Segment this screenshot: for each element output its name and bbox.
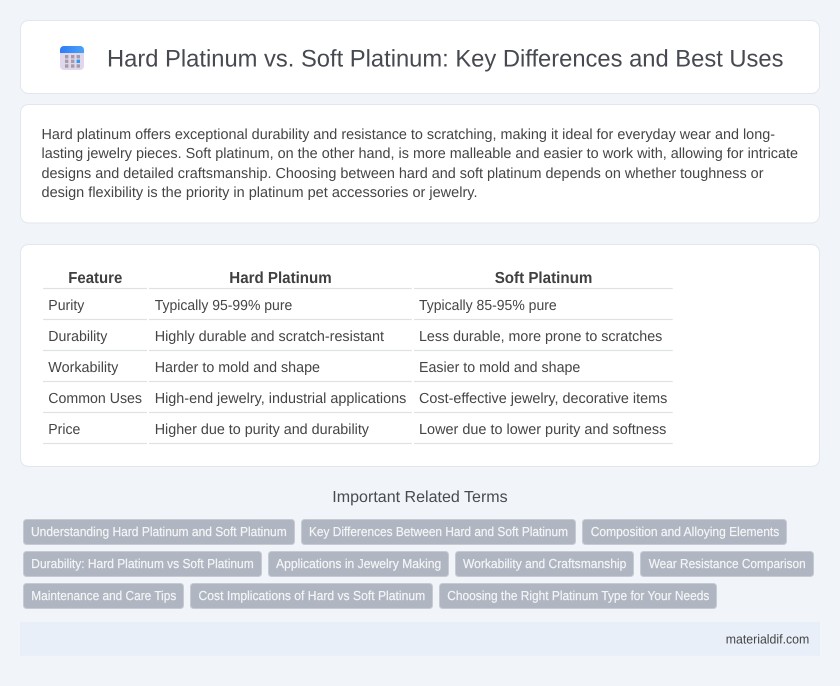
tag xyxy=(456,552,634,576)
tag group: related terms xyxy=(24,520,814,608)
tag xyxy=(24,584,184,608)
table row: durability: Less durable, more prone to scratches xyxy=(419,329,662,345)
table row: durability: Highly durable and scratch-resistant xyxy=(155,329,384,345)
tag: Choosing the Right Platinum Type for Your Needs xyxy=(447,588,710,603)
table row: workability: Harder to mold and shape xyxy=(155,360,320,376)
table row: common uses: Common Uses xyxy=(48,391,142,407)
table row: durability: Durability xyxy=(48,329,108,345)
tag: Workability and Craftsmanship xyxy=(463,556,626,571)
table row: workability xyxy=(48,360,580,376)
tag: Maintenance and Care Tips xyxy=(31,588,177,603)
table header row: Feature xyxy=(68,270,122,287)
table row: common uses: Cost-effective jewelry, decorative items xyxy=(419,391,667,407)
tag: Understanding Hard Platinum and Soft Platinum xyxy=(31,524,287,539)
table row: purity: Typically 85-95% pure xyxy=(419,298,557,314)
tag xyxy=(190,584,432,608)
panel: comparison table xyxy=(20,244,820,466)
table row: purity: Purity xyxy=(48,298,85,314)
table row: common uses: High-end jewelry, industrial applications xyxy=(155,391,406,407)
tag xyxy=(582,520,786,544)
tag xyxy=(640,552,814,576)
table row: workability: Workability xyxy=(48,360,119,376)
footer xyxy=(20,622,820,656)
table row: price xyxy=(48,422,666,438)
text block: intro xyxy=(42,127,798,201)
tag xyxy=(24,520,294,544)
title: Hard Platinum vs. Soft Platinum: Key Differences and Best Uses xyxy=(107,46,784,73)
tag xyxy=(268,552,448,576)
tag: Applications in Jewelry Making xyxy=(276,556,441,571)
tag: Wear Resistance Comparison xyxy=(649,556,806,571)
tag xyxy=(24,552,262,576)
text block: intro: Hard platinum offers exceptional durability and resistance to scratching, making it ideal for everyday wear and long- xyxy=(42,127,775,143)
table header row: Hard Platinum xyxy=(229,270,332,287)
panel: intro paragraph xyxy=(20,104,820,223)
table row: purity xyxy=(48,298,557,314)
text block: intro: design flexibility is the priority in platinum pet accessories or jewelry. xyxy=(42,185,478,201)
table row: price: Price xyxy=(48,422,80,438)
tag xyxy=(302,520,576,544)
tag: Composition and Alloying Elements xyxy=(591,524,780,539)
table header row: Soft Platinum xyxy=(495,270,592,287)
table row: common uses xyxy=(48,391,667,407)
table row: durability xyxy=(48,329,662,345)
tag: Key Differences Between Hard and Soft Platinum xyxy=(309,524,568,539)
icon: calendar xyxy=(60,46,84,70)
heading: important related terms: Important Related Terms xyxy=(332,489,508,506)
tag xyxy=(440,584,716,608)
table row: price: Lower due to lower purity and softness xyxy=(419,422,666,438)
table row: price: Higher due to purity and durability xyxy=(155,422,370,438)
tag: Durability: Hard Platinum vs Soft Platinum xyxy=(31,556,254,571)
table row: workability: Easier to mold and shape xyxy=(419,360,580,376)
tag: Cost Implications of Hard vs Soft Platinum xyxy=(198,588,425,603)
text block: intro: designs and detailed craftsmanship. Choosing between hard and soft platinum depends on whether toughness or xyxy=(42,166,764,182)
table header row xyxy=(68,270,592,287)
text block: intro: lasting jewelry pieces. Soft platinum, on the other hand, is more malleable and easier to work with, allowing for intricate xyxy=(42,146,798,162)
footer source text: materialdif.com xyxy=(726,631,809,646)
table row: purity: Typically 95-99% pure xyxy=(155,298,292,314)
panel: header xyxy=(20,20,820,94)
